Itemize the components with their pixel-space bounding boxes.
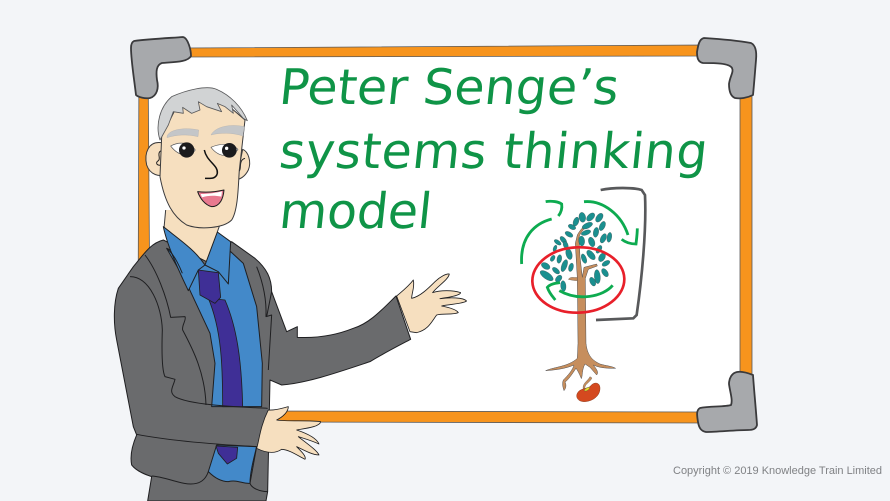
tie	[198, 270, 243, 464]
eyebrows	[167, 129, 199, 138]
green feedback arrows	[522, 201, 637, 300]
head	[146, 88, 250, 228]
nose	[204, 150, 217, 178]
hair	[158, 88, 247, 140]
raised hand	[397, 274, 467, 333]
title: Peter Senge’s	[277, 58, 622, 116]
neck	[164, 210, 223, 267]
title	[277, 58, 711, 240]
suit detail lines	[130, 248, 272, 492]
suit	[114, 240, 411, 501]
shirt	[167, 248, 262, 407]
red highlight ellipse	[531, 246, 625, 314]
mouth	[198, 190, 224, 207]
board corner brackets	[131, 37, 757, 432]
ears	[146, 142, 165, 175]
title: systems thinking	[277, 122, 711, 180]
face	[160, 98, 245, 228]
collar	[163, 227, 231, 291]
tree systems thinking diagram	[522, 188, 645, 402]
copyright notice: Copyright © 2019 Knowledge Train Limited	[673, 465, 882, 477]
bracket	[596, 188, 645, 320]
lower hand	[257, 407, 321, 459]
tree trunk, branches and roots	[546, 223, 616, 391]
eyes	[171, 143, 195, 155]
presenter character	[114, 88, 467, 501]
seed	[577, 377, 600, 402]
whiteboard with orange frame	[138, 45, 752, 423]
leaves	[538, 211, 612, 292]
title: model	[277, 182, 435, 240]
